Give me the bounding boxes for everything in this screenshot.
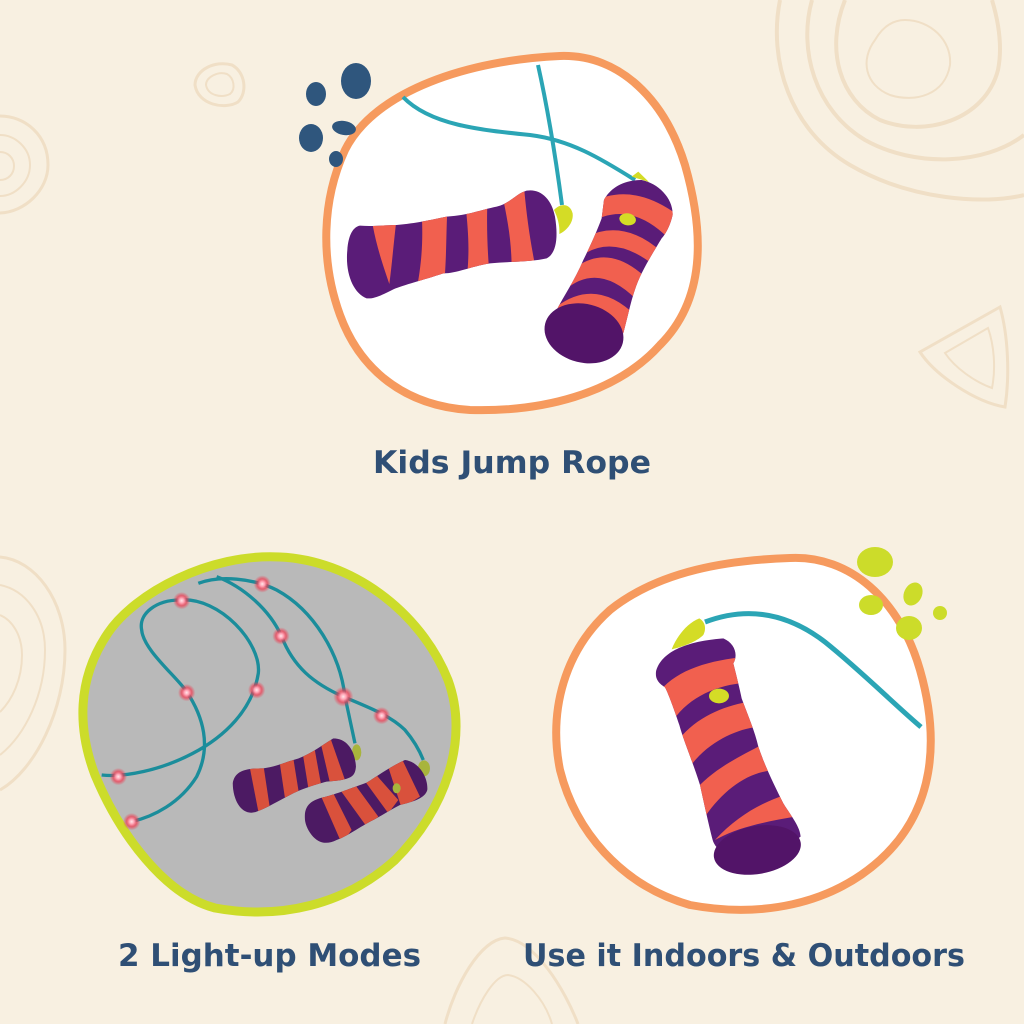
panel: light-up modes — [83, 557, 456, 912]
heading: kids jump rope: Kids Jump Rope — [373, 445, 651, 481]
rope: top — [403, 65, 635, 205]
handle: upper — [232, 738, 362, 813]
rope: right — [705, 614, 921, 727]
blob frame: right — [556, 558, 931, 910]
paw dots: navy — [299, 63, 371, 167]
heading: light-up modes: 2 Light-up Modes — [118, 938, 421, 974]
handle: lower — [302, 757, 430, 847]
blob frame: top — [326, 56, 698, 410]
handle: horizontal — [343, 187, 573, 302]
handle: vertical — [544, 172, 673, 364]
handle: large — [653, 618, 805, 881]
heading: indoors and outdoors: Use it Indoors & Outdoors — [523, 938, 965, 974]
panel: kids jump rope — [299, 56, 698, 410]
paw dots: lime — [857, 547, 947, 640]
led lights — [110, 575, 390, 830]
rope with lights — [102, 577, 423, 822]
blob frame: left — [83, 557, 456, 912]
panel: indoors and outdoors — [556, 547, 947, 910]
